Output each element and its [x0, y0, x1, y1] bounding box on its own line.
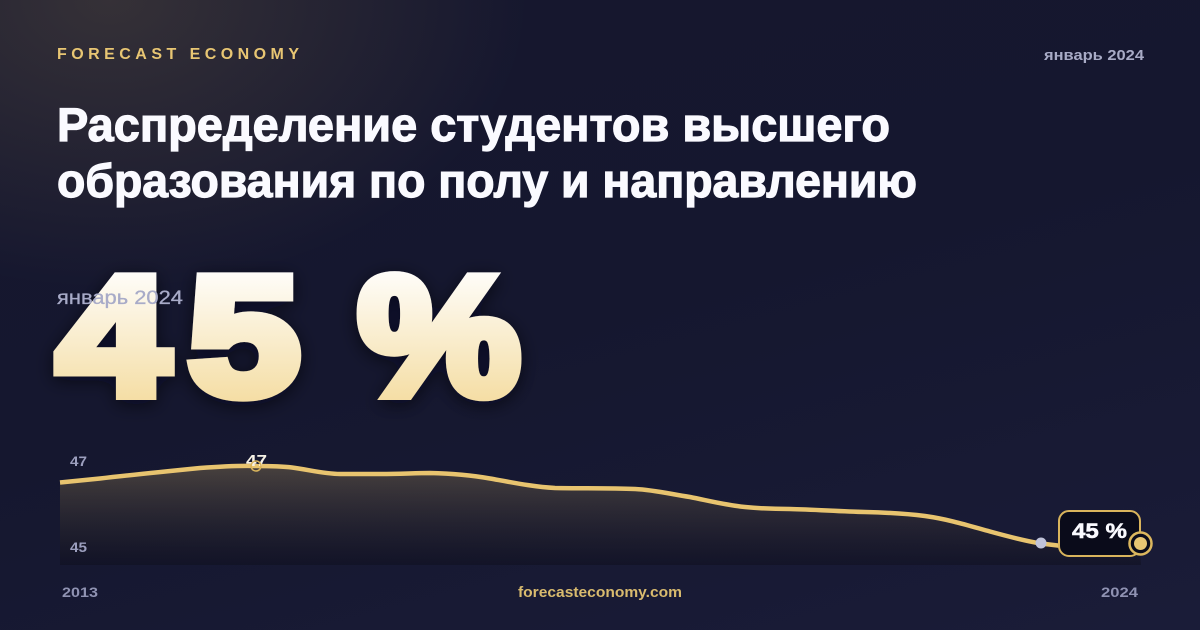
peak marker: [251, 461, 261, 471]
big number: 5: [188, 243, 300, 430]
y axis max label: 47: [70, 454, 87, 469]
previous point marker: [1036, 538, 1046, 548]
source url: forecasteconomy.com: [518, 585, 682, 601]
title: [57, 98, 917, 207]
y axis min label: 45: [70, 540, 88, 555]
brand label: FORECAST ECONOMY: [57, 46, 299, 63]
peak label: 47: [246, 453, 267, 470]
date top right: январь 2024: [1044, 48, 1144, 64]
chart area fill: [60, 466, 1141, 565]
chart line: [60, 466, 1062, 546]
line chart: [60, 453, 1152, 565]
big number: 4: [58, 243, 169, 430]
big number: %: [358, 243, 520, 431]
title: Распределение студентов высшего: [57, 98, 890, 151]
big number: [58, 243, 520, 431]
date overlapping big number: январь 2024: [57, 288, 183, 309]
title: образования по полу и направлению: [57, 154, 917, 207]
x axis start: 2013: [62, 584, 98, 600]
latest value callout: 45 %: [1072, 520, 1127, 543]
latest value callout: [1059, 511, 1140, 556]
latest point marker: [1130, 532, 1152, 554]
x axis end: 2024: [1101, 584, 1138, 600]
